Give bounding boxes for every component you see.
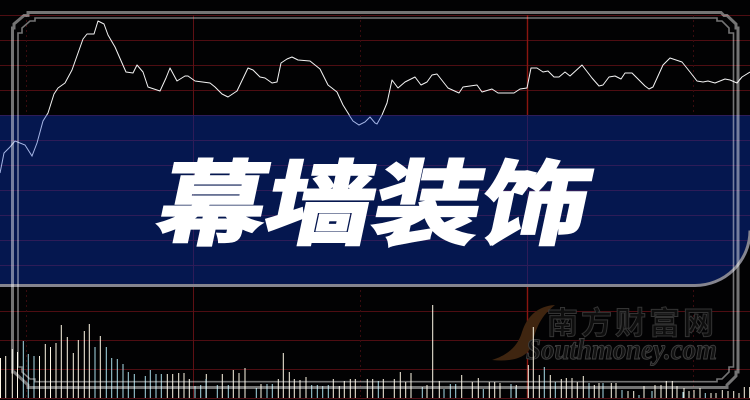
volume bar chart [0,305,750,398]
title: 幕墙装饰 [149,154,601,257]
watermark chinese name: 南方财富网 [547,306,717,341]
navy title band [0,115,750,285]
watermark url: Southmoney.com [526,333,717,366]
watermark: southmoney logo [492,305,717,366]
icon: logo swoosh [492,305,555,360]
price line chart [46,20,750,115]
price line inside band, dip [349,115,382,125]
band outline [0,230,750,286]
band grid lines [0,115,750,285]
price line inside band, left [0,115,48,174]
